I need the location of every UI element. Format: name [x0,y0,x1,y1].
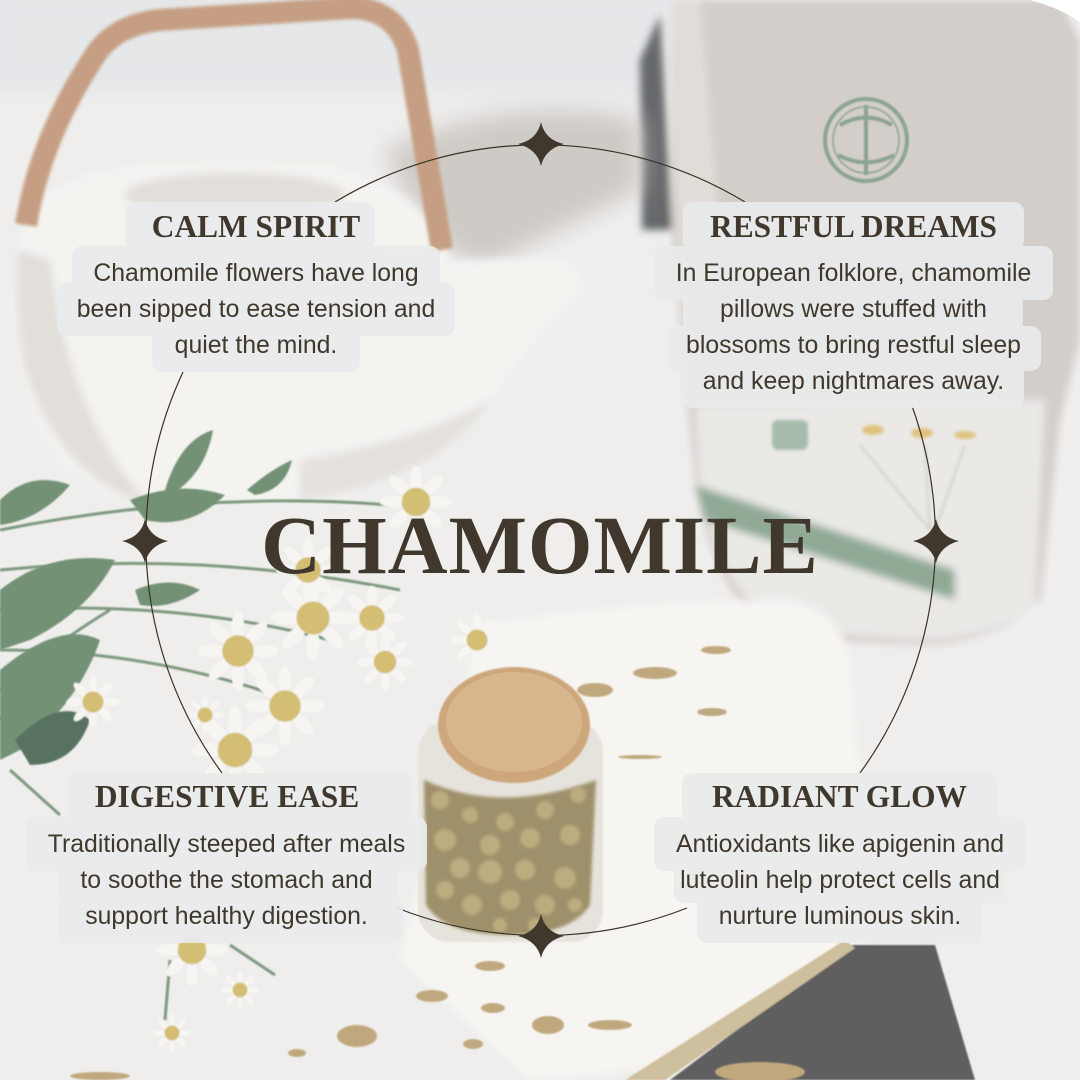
heading: CALM SPIRIT [152,209,360,244]
panel: digestive ease [48,773,427,943]
marble board [400,600,870,1080]
teapot [17,165,585,505]
body text [77,260,435,359]
body text: pillows were stuffed with [720,296,987,323]
scattered petals [70,646,805,1080]
greenery [0,501,400,1020]
panel: calm spirit [57,202,455,372]
body text: to soothe the stomach and [80,867,373,894]
body text: been sipped to ease tension and [77,296,435,323]
tea bag logo [825,99,907,181]
slate tray [625,940,975,1080]
tea bag chamomile print [772,420,976,530]
chamomile blossoms [66,466,504,1052]
body text: nurture luminous skin. [719,903,961,930]
body text: In European folklore, chamomile [676,260,1031,287]
top right white corner [1030,0,1080,22]
body text: Chamomile flowers have long [93,260,419,287]
glass jar with dried chamomile [418,667,603,942]
body text: Traditionally steeped after meals [48,831,405,858]
body text: support healthy digestion. [85,903,368,930]
main title: CHAMOMILE [261,499,819,591]
star top [518,122,564,166]
body text: and keep nightmares away. [703,368,1004,395]
body text [676,831,1004,930]
heading: RADIANT GLOW [712,779,967,814]
panel: radiant glow [654,773,1004,943]
body text: Antioxidants like apigenin and [676,831,1004,858]
body text [48,831,405,930]
panel: restful dreams [670,202,1053,408]
teapot handle [26,8,442,250]
star left [122,519,168,563]
star bottom [518,914,564,958]
body text: quiet the mind. [175,332,337,359]
heading: DIGESTIVE EASE [95,779,359,814]
tea bag [640,0,1080,645]
back sugar tin [385,110,640,270]
star right [913,519,959,563]
body text: luteolin help protect cells and [680,867,1000,894]
body text [676,260,1031,395]
body text: blossoms to bring restful sleep [686,332,1021,359]
heading: RESTFUL DREAMS [710,209,997,244]
